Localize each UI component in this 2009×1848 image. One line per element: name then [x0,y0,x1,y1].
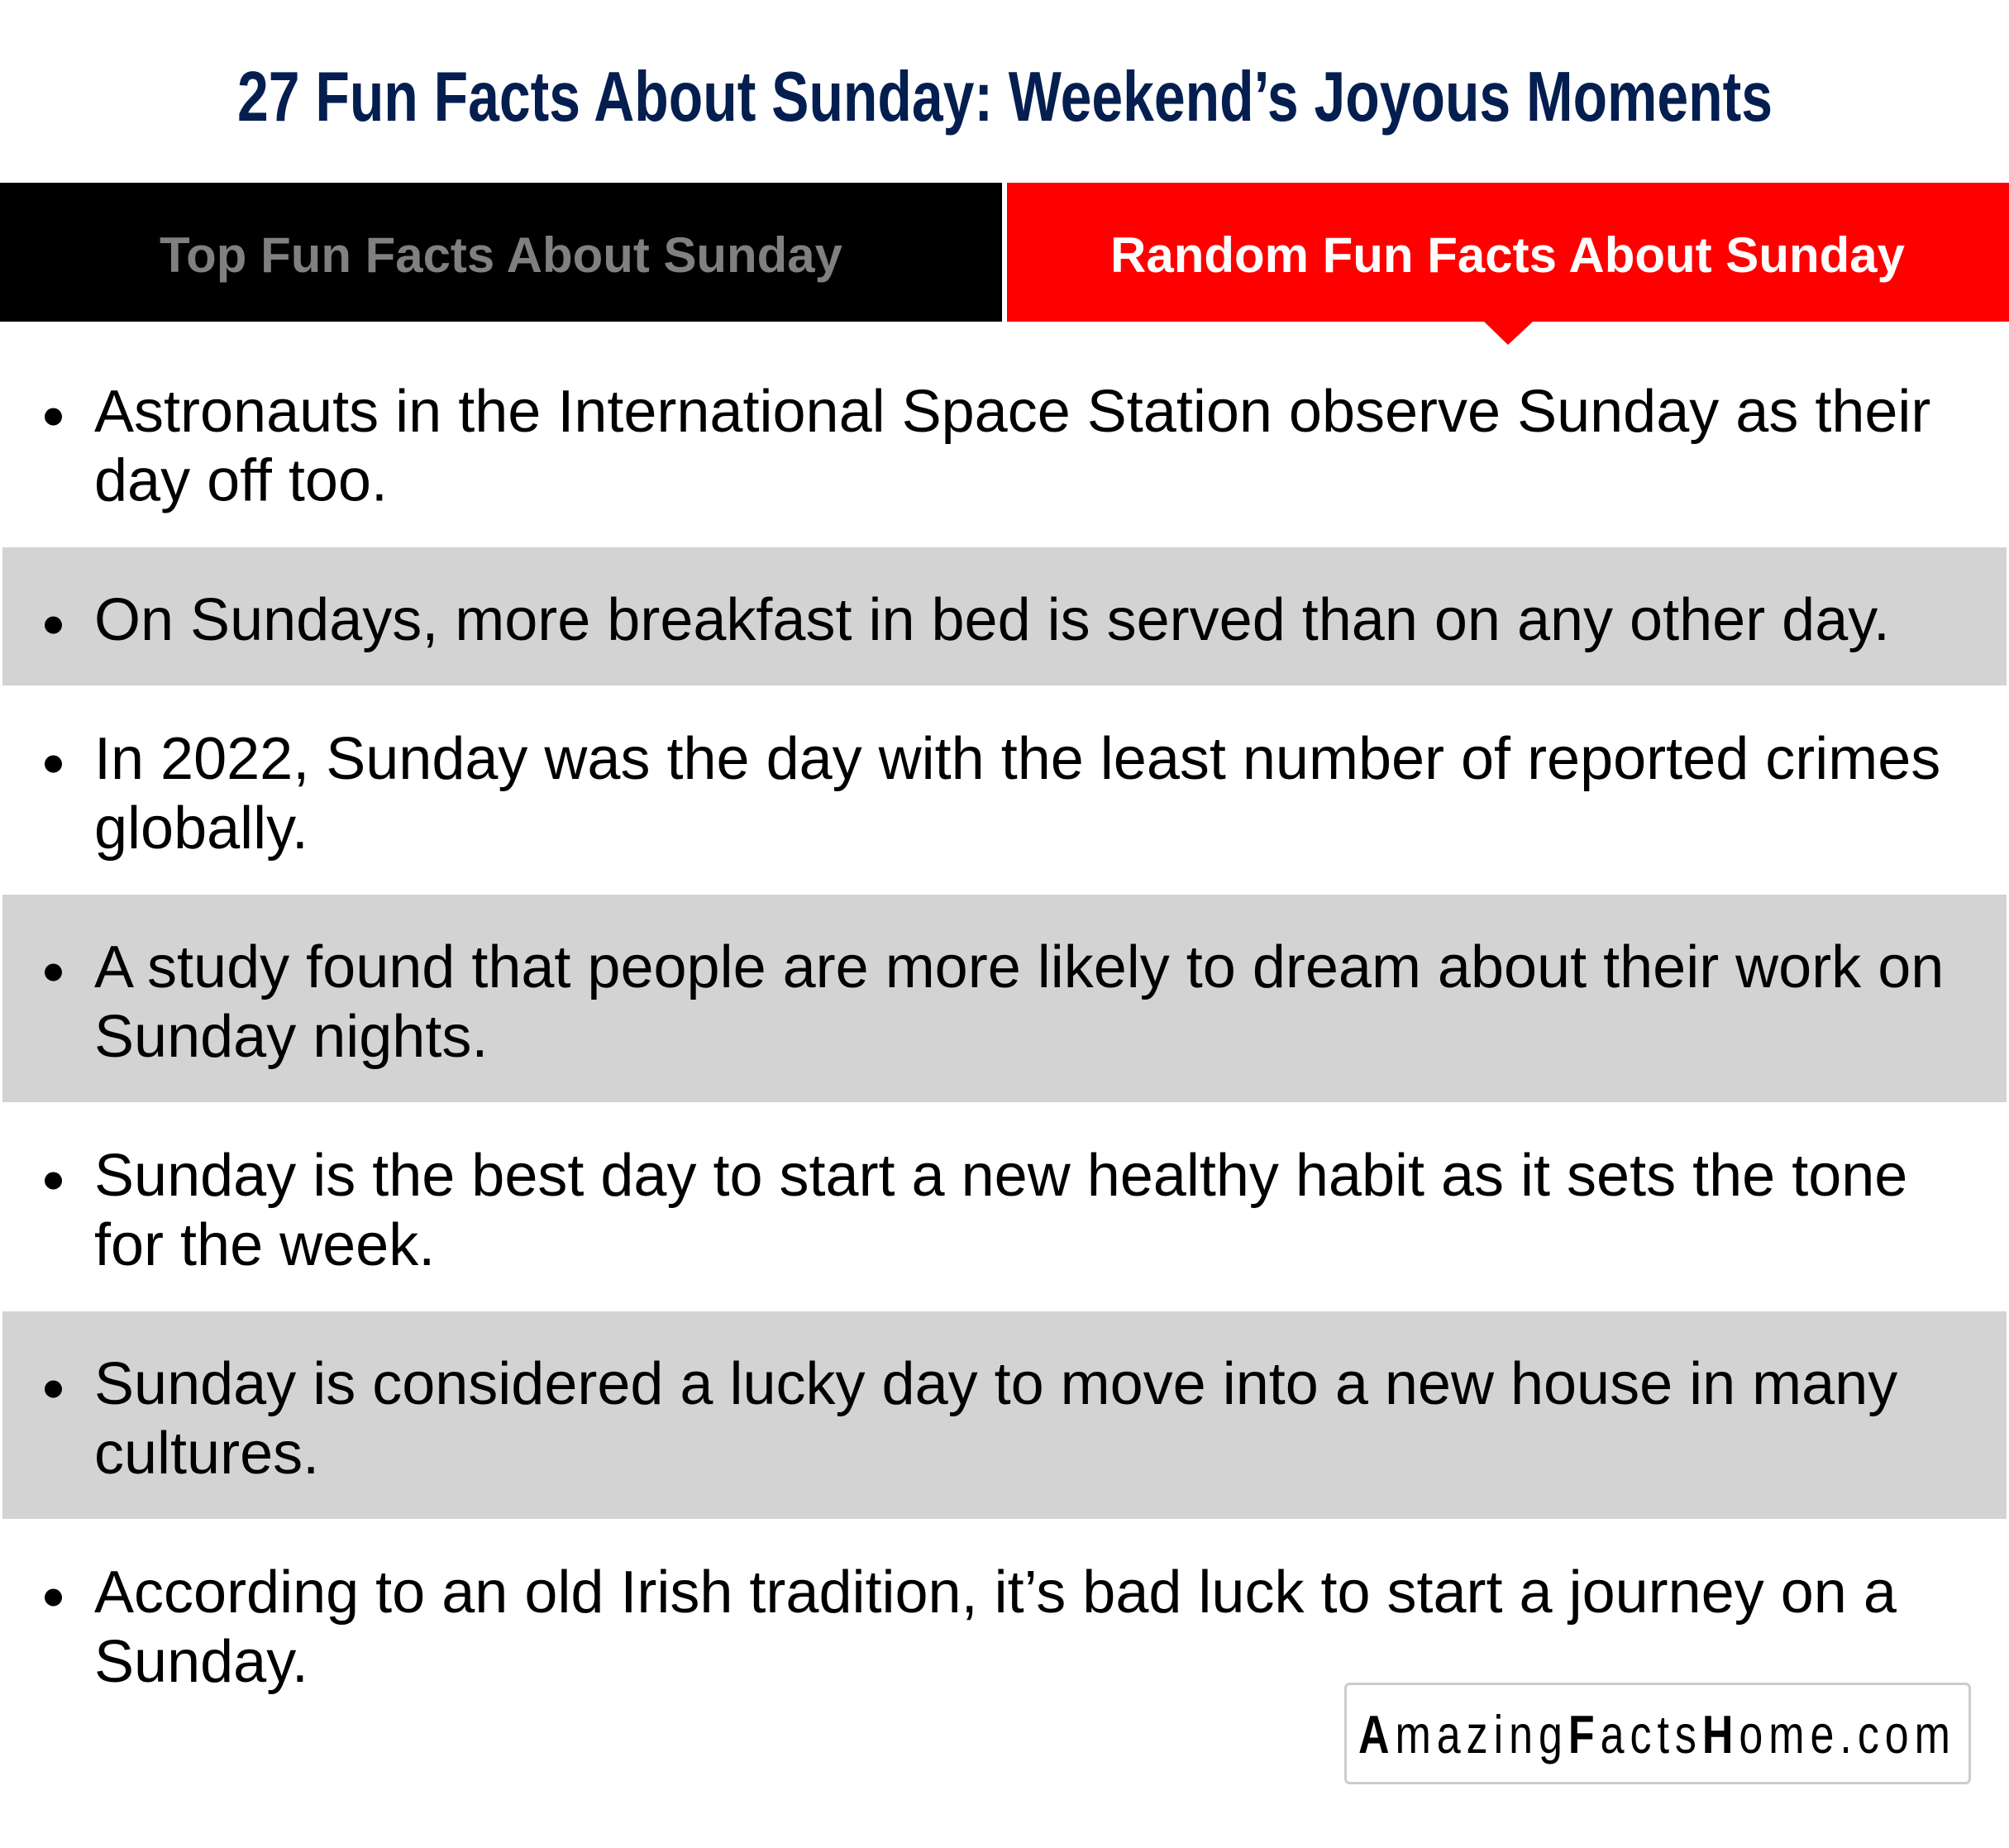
fact 4 panel: Sunday nights. [94,1004,488,1070]
fact 1 [45,379,1930,514]
fact 7: Sunday. [94,1629,308,1695]
fact 5 [45,1143,1907,1278]
brand badge: AmazingFactsHome.com [1358,1706,1950,1764]
tab: random fun facts (active) [1007,183,2009,345]
tab: top fun facts [0,183,1002,322]
fact 7: According to an old Irish tradition, it’s bad luck to start a journey on a [94,1559,1897,1626]
fact 4 panel [2,895,2007,1102]
fact 2 panel: On Sundays, more breakfast in bed is served than on any other day. [94,587,1890,653]
fact 3 [45,726,1940,862]
fact 7 [45,1559,1897,1695]
fact 2 panel [2,547,2007,685]
brand badge [1346,1683,1969,1783]
fact 6 panel: Sunday is considered a lucky day to move into a new house in many [94,1351,1897,1417]
fact 5: for the week. [94,1212,435,1278]
fact 6 panel: cultures. [94,1421,319,1487]
fact 1: Astronauts in the International Space Station observe Sunday as their [94,379,1930,445]
fact 5: Sunday is the best day to start a new healthy habit as it sets the tone [94,1143,1907,1209]
tab: random fun facts (active): Random Fun Facts About Sunday [1110,227,1906,283]
fact 6 panel [2,1311,2007,1519]
fact 3: In 2022, Sunday was the day with the least number of reported crimes [94,726,1940,792]
fact 1: day off too. [94,448,388,514]
fact 4 panel: A study found that people are more likely to dream about their work on [94,934,1944,1000]
fact 3: globally. [94,795,308,862]
tab: top fun facts: Top Fun Facts About Sunday [160,227,843,283]
